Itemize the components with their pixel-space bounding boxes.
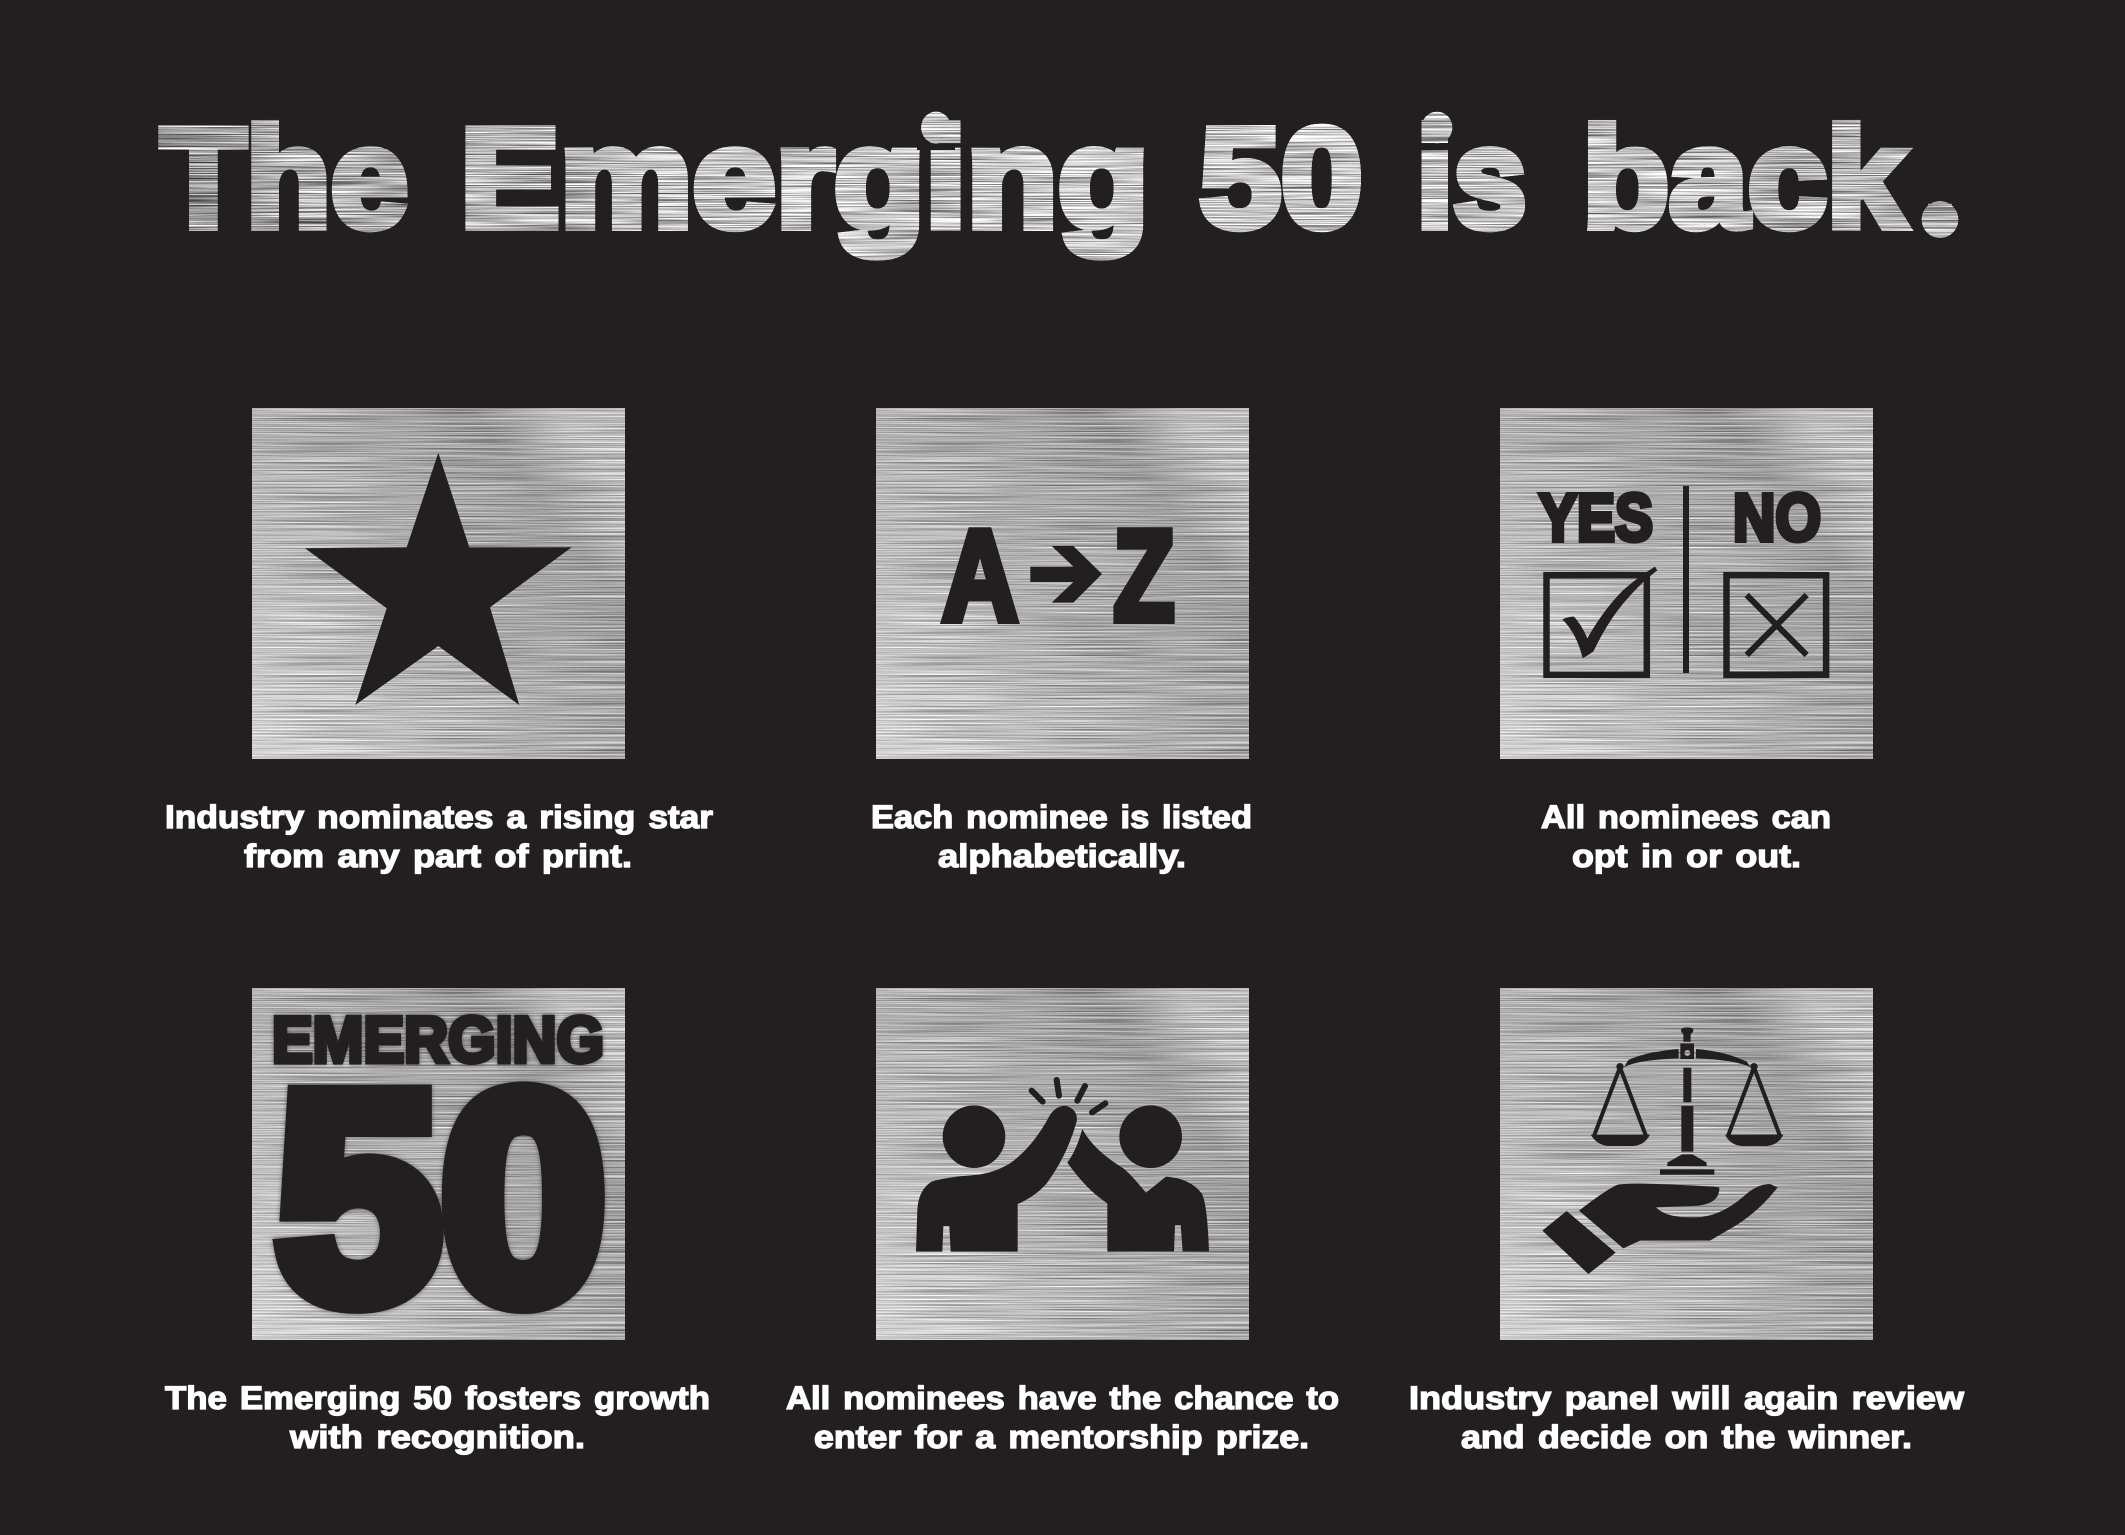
icon: A to Z — [942, 504, 1174, 648]
caption: alphabetical — [871, 799, 1252, 874]
caption: opt in or out: All nominees can — [1541, 799, 1831, 835]
metal plate: emerging 50 — [252, 988, 625, 1340]
panel: industry nominates — [165, 408, 713, 874]
logo: emerging 50: 50 — [276, 1031, 606, 1363]
icon: cross — [1747, 595, 1807, 655]
icon: yes no choice: YES — [1539, 480, 1653, 556]
icon: scales of justice on hand — [1542, 1027, 1783, 1274]
icon: yes no choice: NO — [1733, 480, 1821, 556]
title: . — [1920, 98, 1960, 256]
title: 50 — [1200, 98, 1362, 256]
title: Emerging — [460, 98, 1149, 256]
caption: opt in or out: opt in or out. — [1572, 838, 1801, 874]
metal plate: star — [252, 408, 625, 759]
caption: fosters growth: with recognition. — [289, 1419, 585, 1455]
title: The — [161, 98, 408, 256]
icon: A to Z: A — [942, 504, 1018, 648]
caption: alphabetical: alphabetically. — [938, 838, 1186, 874]
caption: rising star: Industry nominates a rising star — [165, 799, 713, 835]
metal plate: high five — [876, 988, 1249, 1340]
icon: A to Z: Z — [1114, 504, 1174, 648]
metal plate: yes or no — [1500, 408, 1873, 759]
caption: opt in or out — [1541, 799, 1831, 874]
caption: mentorship prize — [786, 1380, 1339, 1455]
caption: mentorship prize: enter for a mentorship prize. — [814, 1419, 1309, 1455]
panel: fosters growth — [165, 988, 710, 1455]
icon: yes no choice — [1539, 480, 1826, 675]
metal plate: A to Z — [876, 408, 1249, 759]
icon: high five — [916, 1080, 1209, 1252]
panel: panel decides winner — [1409, 988, 1964, 1455]
caption: mentorship prize: All nominees have the chance to — [786, 1380, 1339, 1416]
logo: emerging 50: EMERGING — [272, 1003, 604, 1076]
title: is — [1416, 98, 1526, 256]
title: back — [1582, 98, 1906, 256]
caption: alphabetical: Each nominee is listed — [871, 799, 1252, 835]
panel: mentorship prize — [786, 988, 1339, 1455]
icon: star — [305, 453, 572, 705]
caption: panel decides: Industry panel will again review — [1409, 1380, 1964, 1416]
caption: panel decides — [1409, 1380, 1964, 1455]
caption: rising star: from any part of print. — [244, 838, 632, 874]
caption: fosters growth — [165, 1380, 710, 1455]
icon: arrow — [1030, 546, 1102, 603]
caption: panel decides: and decide on the winner. — [1461, 1419, 1912, 1455]
caption: fosters growth: The Emerging 50 fosters growth — [165, 1380, 710, 1416]
panel: opt in or out — [1500, 408, 1873, 874]
metal plate: scales — [1500, 988, 1873, 1340]
caption: rising star — [165, 799, 713, 874]
panel: alphabetical — [871, 408, 1252, 874]
title — [161, 98, 1960, 256]
icon: check mark — [1562, 567, 1657, 658]
